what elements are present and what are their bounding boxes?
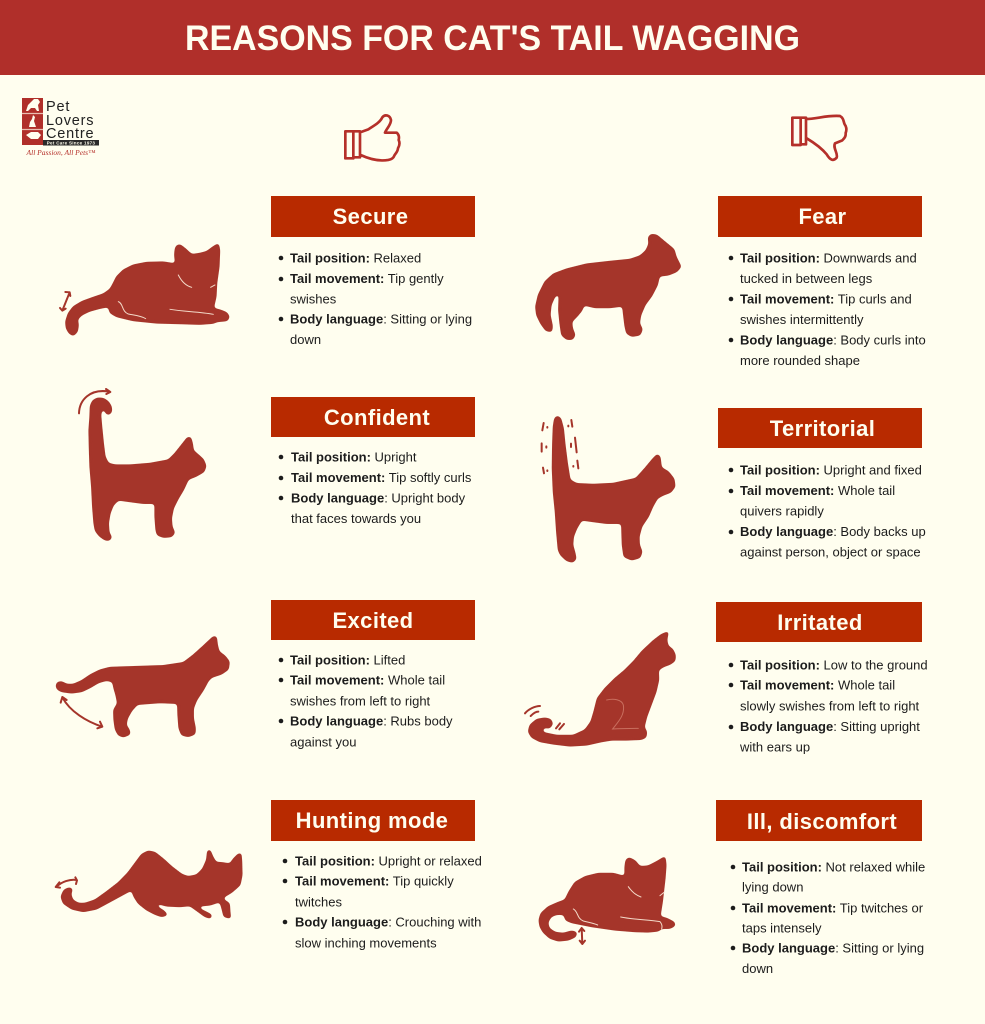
text: Confident details: that faces towards you xyxy=(291,511,421,526)
text: Confident details xyxy=(279,450,472,526)
text: Territorial details: Tail movement: Whole tail xyxy=(740,483,895,498)
logo: Pet Lovers Centre: All Passion, All Pets™ xyxy=(26,148,96,157)
text: Fear details: tucked in between legs xyxy=(740,271,873,286)
text: Fear details: Tail movement: Tip curls and xyxy=(740,292,912,306)
cat: ill, lying with twitching tail xyxy=(539,857,675,944)
text: Fear details: swishes intermittently xyxy=(740,312,864,327)
heading: Territorial: Territorial xyxy=(770,416,875,441)
title banner xyxy=(0,0,985,75)
text: Irritated details: slowly swishes from left to right xyxy=(740,698,920,714)
heading: Confident: Confident xyxy=(324,405,430,430)
text: Ill, discomfort details: Body language: Sitting or lying xyxy=(742,940,924,956)
heading: Irritated xyxy=(716,602,922,642)
panel: Secure xyxy=(60,196,475,347)
text: Hunting mode details: Tail movement: Tip quickly xyxy=(295,874,454,888)
text: Secure details: Tail movement: Tip gently xyxy=(290,271,444,286)
logo: Pet Lovers Centre: Pet Care Since 1973 xyxy=(47,140,95,146)
text: Excited details xyxy=(279,652,453,750)
heading: Secure xyxy=(271,196,475,237)
text: Irritated details: Tail movement: Whole tail xyxy=(740,678,895,692)
text: Hunting mode details: Tail position: Upright or relaxed xyxy=(295,854,482,868)
cat: territorial, quivering tail xyxy=(542,416,675,562)
text: Territorial details: against person, object or space xyxy=(740,544,921,560)
panel: Territorial xyxy=(542,408,926,562)
text: Fear details xyxy=(729,250,926,368)
text: Hunting mode details: Body language: Crouching with xyxy=(295,914,481,930)
text: Confident details: Tail movement: Tip softly curls xyxy=(291,470,472,485)
panel: Confident xyxy=(79,389,475,540)
title banner: REASONS FOR CAT'S TAIL WAGGING xyxy=(185,19,800,58)
text: Excited details: Tail movement: Whole tail xyxy=(290,672,445,688)
heading: Secure: Secure xyxy=(333,204,408,229)
panel: Ill, discomfort xyxy=(539,800,925,976)
heading: Excited: Excited xyxy=(332,608,414,633)
text: Hunting mode details: slow inching movements xyxy=(295,936,437,950)
text: Territorial details: Tail position: Upright and fixed xyxy=(740,462,922,478)
heading: Ill, discomfort xyxy=(716,800,922,841)
text: Irritated details: with ears up xyxy=(739,740,810,754)
text: Confident details: Tail position: Upright xyxy=(291,450,417,464)
text: Fear details: Body language: Body curls into xyxy=(740,332,926,348)
text: Ill, discomfort details: down xyxy=(742,961,773,976)
text: Territorial details xyxy=(729,462,926,560)
heading: Fear xyxy=(718,196,922,237)
heading: Ill, discomfort: Ill, discomfort xyxy=(747,809,897,834)
logo: Pet Lovers Centre: Lovers xyxy=(46,113,94,129)
text: Secure details: swishes xyxy=(290,292,337,306)
text: Ill, discomfort details: Tail movement: Tip twitches or xyxy=(742,900,924,916)
cat: irritated, sitting upright xyxy=(525,632,675,746)
text: Secure details xyxy=(279,250,472,347)
text: Ill, discomfort details: Tail position: Not relaxed while xyxy=(742,860,925,874)
cat: secure, relaxed tail xyxy=(60,244,229,336)
heading: Fear: Fear xyxy=(798,204,847,229)
heading: Excited xyxy=(271,600,475,640)
heading: Confident xyxy=(271,397,475,437)
logo: Pet Lovers Centre xyxy=(22,98,99,157)
text: Territorial details: quivers rapidly xyxy=(740,504,824,518)
text: Ill, discomfort details: taps intensely xyxy=(742,920,822,936)
text: Irritated details: Body language: Sitting upright xyxy=(740,719,920,734)
text: Excited details: swishes from left to right xyxy=(290,694,431,708)
text: Ill, discomfort details: lying down xyxy=(742,880,803,894)
cat: confident, upright tail xyxy=(79,389,206,540)
text: Confident details: Body language: Upright body xyxy=(291,490,466,506)
logo: Pet Lovers Centre: Centre xyxy=(46,126,94,142)
heading: Hunting mode xyxy=(271,800,475,841)
text: Irritated details: Tail position: Low to the ground xyxy=(740,658,928,672)
panel: Fear xyxy=(536,196,926,368)
text: Fear details: Tail position: Downwards and xyxy=(740,250,917,266)
text: Excited details: Body language: Rubs body xyxy=(290,714,453,728)
text: Ill, discomfort details xyxy=(731,860,925,976)
panel: Irritated xyxy=(525,602,928,754)
text: Irritated details xyxy=(729,658,928,754)
icon: thumbs up xyxy=(345,115,399,160)
heading: Territorial xyxy=(718,408,922,448)
icon: thumbs down xyxy=(792,116,846,160)
text: Territorial details: Body language: Body backs up xyxy=(740,524,926,539)
panel: Excited xyxy=(56,600,475,750)
text: Excited details: Tail position: Lifted xyxy=(290,652,405,668)
logo: Pet Lovers Centre: Pet xyxy=(46,99,70,115)
text: Hunting mode details: twitches xyxy=(295,894,342,910)
text: Secure details: Tail position: Relaxed xyxy=(290,250,421,266)
text: Excited details: against you xyxy=(290,734,356,750)
text: Secure details: down xyxy=(290,332,321,347)
cat: excited, lifted tail xyxy=(56,637,229,737)
heading: Hunting mode: Hunting mode xyxy=(296,808,448,833)
text: Fear details: more rounded shape xyxy=(740,353,860,368)
cat: fear, tucked tail xyxy=(536,234,681,339)
text: Secure details: Body language: Sitting or lying xyxy=(290,312,472,326)
panel: Hunting mode xyxy=(56,800,482,950)
text: Hunting mode details xyxy=(283,854,482,950)
cat: hunting, crouching xyxy=(56,850,242,918)
heading: Irritated: Irritated xyxy=(777,610,863,635)
